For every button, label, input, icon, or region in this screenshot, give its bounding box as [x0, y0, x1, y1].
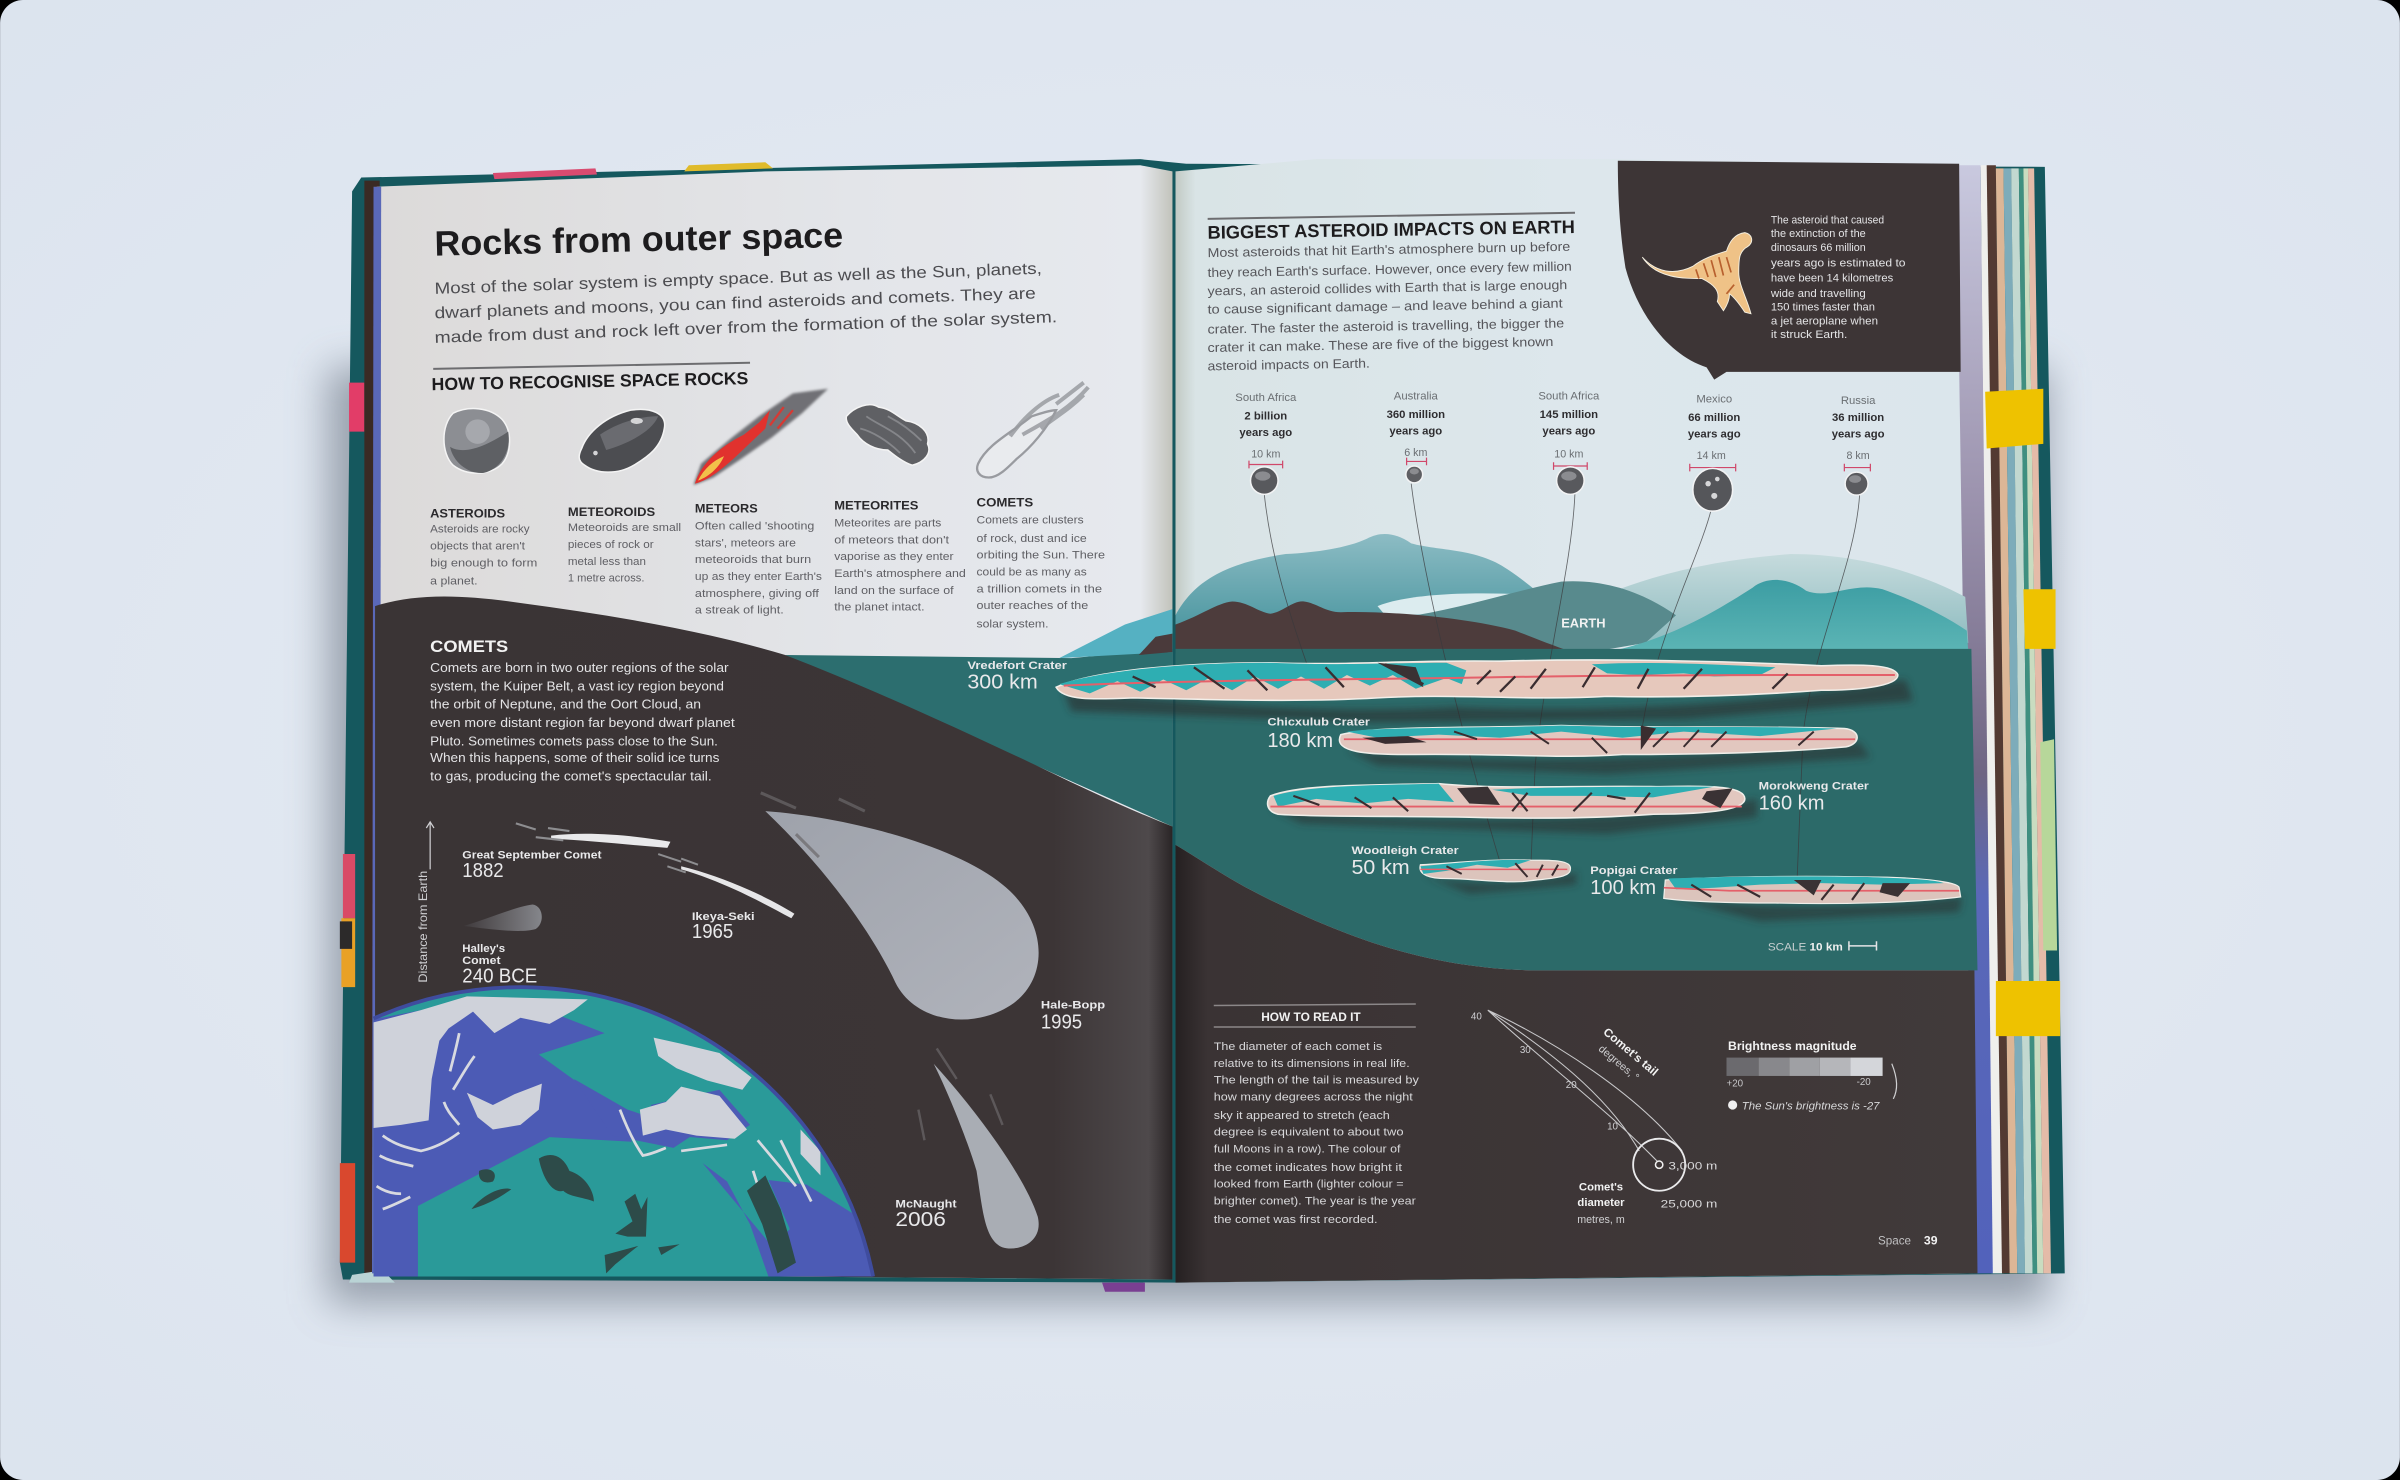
- brightness legend: The Sun's brightness is -27: [1742, 1101, 1880, 1113]
- comet: great september: 1882: [462, 860, 504, 882]
- caption: comets: orbiting the Sun. There: [977, 550, 1105, 562]
- callout text: wide and travelling: [1770, 288, 1866, 300]
- left dark sky: [375, 596, 1172, 1280]
- scale: SCALE 10 km: [1768, 941, 1843, 953]
- caption: meteors: up as they enter Earth's: [695, 571, 822, 583]
- brightness legend: Brightness magnitude: [1728, 1039, 1857, 1053]
- how to read body: looked from Earth (lighter colour =: [1214, 1179, 1404, 1191]
- page number: 39: [1924, 1233, 1938, 1247]
- impact column: south africa 2 billion: 10 km: [1251, 449, 1280, 461]
- crater labels: Morokweng Crater: [1759, 781, 1869, 793]
- earth dark continents: [471, 1155, 796, 1273]
- comet reading diagram: 30: [1520, 1045, 1531, 1056]
- purple page stripe: [1956, 165, 1993, 1273]
- how to read body: sky it appeared to stretch (each: [1214, 1110, 1390, 1122]
- page number: Space: [1878, 1234, 1911, 1247]
- impact column: south africa 145: 145 million: [1540, 409, 1598, 421]
- crater: chicxulub: [1339, 725, 1870, 774]
- brightness legend: -20: [1857, 1077, 1871, 1088]
- caption: meteorites: the planet intact.: [834, 602, 925, 614]
- comet: mcnaught: 2006: [895, 1209, 946, 1231]
- crater labels: Woodleigh Crater: [1352, 845, 1459, 857]
- caption: meteors: [695, 502, 822, 617]
- brightness legend: [1726, 1039, 1897, 1113]
- earth globe: [374, 987, 882, 1276]
- right teal crater ground: [1176, 649, 1977, 970]
- comet: halley: 240 BCE: [462, 966, 537, 988]
- page edges: [1981, 165, 2051, 1273]
- comet reading diagram: diameter: [1577, 1197, 1625, 1209]
- caption: meteorites: METEORITES: [834, 499, 918, 513]
- impact column: south africa 2 billion: South Africa: [1235, 392, 1297, 404]
- caption: comets: [977, 496, 1105, 631]
- impact column: south africa 145: [1538, 390, 1600, 494]
- caption: meteoroids: 1 metre across.: [568, 573, 644, 585]
- impacts body text: years, an asteroid collides with Earth that is large enough: [1207, 277, 1567, 298]
- crater labels: 160 km: [1759, 793, 1824, 815]
- caption: comets: solar system.: [977, 619, 1048, 631]
- how to read body: [1214, 1041, 1419, 1226]
- caption: comets: of rock, dust and ice: [977, 533, 1087, 545]
- crater labels: [967, 660, 1869, 899]
- comet: mcnaught: [895, 1048, 1039, 1248]
- title: Rocks from outer space: [434, 216, 843, 264]
- caption: meteoroids: pieces of rock or: [568, 539, 654, 551]
- comet reading diagram: Comet's tail: [1601, 1025, 1661, 1079]
- crater labels: Vredefort Crater: [967, 660, 1068, 672]
- impact line paths: [1264, 484, 1860, 885]
- caption: meteoroids: METEOROIDS: [568, 505, 655, 519]
- how to read body: The length of the tail is measured by: [1214, 1075, 1419, 1087]
- comets section text: even more distant region far beyond dwarf planet: [430, 715, 735, 730]
- impacts body text: asteroid impacts on Earth.: [1207, 356, 1370, 373]
- impact column: mexico: years ago: [1688, 429, 1741, 441]
- callout text: a jet aeroplane when: [1771, 315, 1878, 327]
- page number: [1878, 1233, 1938, 1247]
- how to read body: how many degrees across the night: [1214, 1091, 1414, 1103]
- comet: great september: Great September Comet: [462, 850, 602, 862]
- caption: meteorites: vaporise as they enter: [834, 551, 954, 563]
- how to read body: the comet was first recorded.: [1214, 1214, 1378, 1226]
- caption: meteoroids: [568, 505, 681, 585]
- icon: meteor: [693, 389, 828, 485]
- impacts body text: to cause significant damage – and leave behind a giant: [1207, 296, 1563, 317]
- crater labels: 50 km: [1352, 857, 1410, 879]
- caption: comets: could be as many as: [977, 566, 1087, 578]
- how to read body: degree is equivalent to about two: [1214, 1127, 1404, 1139]
- earth white clouds: [374, 996, 820, 1175]
- caption: asteroids: Asteroids are rocky: [430, 524, 530, 536]
- caption: meteors: Often called 'shooting: [695, 521, 814, 533]
- caption: meteors: a streak of light.: [695, 605, 784, 617]
- caption: meteoroids: Meteoroids are small: [568, 522, 681, 534]
- crater labels: 300 km: [967, 672, 1038, 694]
- callout text: years ago is estimated to: [1771, 257, 1906, 269]
- left page: [372, 165, 1172, 1280]
- icon: comet outline: [977, 383, 1088, 478]
- crater: vredefort: [1056, 660, 1913, 722]
- caption: meteorites: of meteors that don't: [834, 534, 950, 546]
- scale: [1768, 941, 1876, 953]
- impact column: south africa 2 billion: 2 billion: [1244, 410, 1287, 422]
- comet reading diagram: 25,000 m: [1661, 1199, 1717, 1211]
- crater labels: Chicxulub Crater: [1267, 716, 1371, 728]
- comets section text: to gas, producing the comet's spectacular tail.: [430, 769, 712, 784]
- impact column: russia: years ago: [1832, 429, 1885, 441]
- impact column: russia: 8 km: [1847, 450, 1870, 462]
- icon: meteorite: [846, 405, 929, 465]
- heading: biggest asteroid impacts: BIGGEST ASTEROID IMPACTS ON EARTH: [1207, 216, 1575, 243]
- dinosaur callout: [1618, 161, 1961, 380]
- caption: meteorites: land on the surface of: [834, 585, 955, 597]
- callout text: dinosaurs 66 million: [1771, 242, 1866, 254]
- caption: comets: COMETS: [977, 496, 1033, 510]
- comets section text: [430, 637, 735, 784]
- impact column: south africa 2 billion: years ago: [1239, 427, 1292, 439]
- icon: asteroid: [444, 409, 510, 473]
- caption: meteors: atmosphere, giving off: [695, 588, 820, 600]
- comet reading diagram: 3,000 m: [1668, 1160, 1717, 1172]
- crater: morokweng: [1268, 784, 1757, 834]
- impact column: south africa 145: 10 km: [1554, 449, 1584, 461]
- impact column: mexico: 66 million: [1688, 412, 1740, 424]
- right dark base: [1176, 845, 1977, 1283]
- comet: halley: Comet: [462, 955, 501, 967]
- impacts body text: [1207, 239, 1572, 373]
- impacts body text: Most asteroids that hit Earth's atmosphere burn up before: [1207, 239, 1570, 260]
- comet: mcnaught: McNaught: [895, 1199, 957, 1211]
- earth label: EARTH: [1561, 616, 1606, 631]
- comet: hale-bopp: Hale-Bopp: [1041, 1000, 1105, 1012]
- caption: meteoroids: metal less than: [568, 556, 646, 568]
- callout text: the extinction of the: [1771, 228, 1866, 240]
- heading: how to recognise: HOW TO RECOGNISE SPACE ROCKS: [431, 368, 749, 394]
- comets section text: system, the Kuiper Belt, a vast icy region beyond: [430, 678, 724, 693]
- intro text: Most of the solar system is empty space. But as well as the Sun, planets,: [434, 260, 1042, 298]
- how to read body: relative to its dimensions in real life.: [1214, 1058, 1410, 1070]
- impact column: russia: [1832, 395, 1885, 495]
- impact column: russia: Russia: [1841, 395, 1876, 407]
- comet: ikeya-seki: 1965: [692, 921, 733, 943]
- hills: [1176, 534, 1968, 654]
- comet reading diagram: 20: [1566, 1080, 1577, 1091]
- impact column: australia: Australia: [1394, 390, 1439, 402]
- earth cloud streaks: [377, 1033, 811, 1209]
- comet reading diagram: Comet's: [1579, 1182, 1623, 1194]
- impact column: mexico: [1688, 394, 1741, 511]
- caption: comets: Comets are clusters: [977, 514, 1084, 526]
- caption: meteorites: Meteorites are parts: [834, 517, 942, 529]
- icon: dinosaur: [1642, 233, 1752, 314]
- comet: hale-bopp: 1995: [1041, 1012, 1082, 1034]
- book cover: [340, 159, 2065, 1292]
- caption: asteroids: big enough to form: [430, 557, 537, 569]
- intro text: [434, 260, 1057, 347]
- comet reading diagram: metres, m: [1577, 1214, 1625, 1226]
- caption: asteroids: [430, 506, 537, 588]
- comets section text: the orbit of Neptune, and the Oort Cloud, an: [430, 697, 701, 712]
- axis: distance from earth: Distance from Earth: [417, 871, 430, 983]
- comet: ikeya-seki: [658, 854, 794, 943]
- comets section text: Pluto. Sometimes comets pass close to the Sun.: [430, 733, 718, 748]
- book shadow: [328, 367, 2048, 1304]
- caption: meteorites: Earth's atmosphere and: [834, 568, 966, 580]
- caption: asteroids: objects that aren't: [430, 540, 526, 552]
- brightness legend: +20: [1726, 1079, 1744, 1090]
- how to read body: the comet indicates how bright it: [1214, 1162, 1403, 1174]
- impact column: south africa 145: South Africa: [1538, 390, 1600, 402]
- caption: asteroids: ASTEROIDS: [430, 506, 505, 520]
- earth blue east: [574, 1079, 882, 1276]
- icon: meteoroid: [579, 409, 665, 472]
- impacts body text: crater. The faster the asteroid is travelling, the bigger the: [1207, 315, 1564, 337]
- impact column: south africa 2 billion: [1235, 392, 1297, 494]
- comet: great september: [462, 823, 670, 882]
- callout text: [1770, 214, 1906, 341]
- how to read body: The diameter of each comet is: [1214, 1041, 1382, 1053]
- how to read body: full Moons in a row). The colour of: [1214, 1143, 1401, 1155]
- comets section text: COMETS: [430, 637, 508, 656]
- intro text: made from dust and rock left over from the formation of the solar system.: [434, 308, 1057, 347]
- crater labels: 100 km: [1590, 877, 1656, 899]
- comet reading diagram: 40: [1471, 1011, 1482, 1022]
- caption: comets: outer reaches of the: [977, 600, 1088, 612]
- caption: meteors: stars', meteors are: [695, 537, 796, 549]
- impact column: south africa 145: years ago: [1542, 426, 1595, 438]
- how to read it: [1214, 1004, 1419, 1226]
- comets section text: When this happens, some of their solid ice turns: [430, 750, 719, 765]
- impact column: russia: 36 million: [1832, 412, 1884, 424]
- impact column: mexico: 14 km: [1697, 450, 1726, 462]
- impact column: australia: 6 km: [1404, 447, 1427, 459]
- caption: meteors: METEORS: [695, 502, 758, 516]
- comet reading diagram: 10: [1607, 1122, 1619, 1133]
- callout text: 150 times faster than: [1771, 302, 1875, 314]
- comet reading diagram: [1471, 1010, 1717, 1226]
- callout text: The asteroid that caused: [1771, 214, 1884, 226]
- impacts body text: crater it can make. These are five of the biggest known: [1207, 334, 1554, 355]
- comet: halley: Halley's: [462, 943, 505, 955]
- comet: hale-bopp: [761, 793, 1105, 1034]
- caption: meteors: meteoroids that burn: [695, 554, 811, 566]
- crater: woodleigh: [1420, 860, 1577, 894]
- impact column: mexico: Mexico: [1696, 394, 1732, 406]
- comet reading diagram: degrees, °: [1596, 1043, 1641, 1084]
- crater: popigai: [1664, 876, 1962, 921]
- impact column: australia: 360 million: [1387, 409, 1445, 421]
- comet: halley: [462, 905, 542, 988]
- intro text: dwarf planets and moons, you can find asteroids and comets. They are: [434, 284, 1036, 322]
- callout text: it struck Earth.: [1771, 329, 1847, 341]
- caption: meteorites: [834, 499, 966, 614]
- caption: asteroids: a planet.: [430, 576, 478, 588]
- how to read body: brighter comet). The year is the year: [1214, 1196, 1416, 1208]
- impacts body text: they reach Earth's surface. However, once every few million: [1207, 259, 1572, 280]
- crater labels: Popigai Crater: [1590, 865, 1678, 877]
- impact column: australia: [1387, 390, 1445, 483]
- crater labels: 180 km: [1267, 730, 1333, 752]
- impact column: australia: years ago: [1389, 426, 1442, 438]
- axis: distance from earth: [417, 822, 434, 983]
- earth blue oceans: [374, 1002, 632, 1276]
- callout text: have been 14 kilometres: [1771, 273, 1893, 285]
- caption: comets: a trillion comets in the: [977, 583, 1102, 595]
- yellow tabs: [1985, 389, 2060, 1036]
- comet: ikeya-seki: Ikeya-Seki: [692, 911, 755, 923]
- comets section text: Comets are born in two outer regions of the solar: [430, 660, 729, 675]
- right page: [1176, 159, 1977, 1283]
- left teal section: [785, 609, 1172, 826]
- how to read it: HOW TO READ IT: [1261, 1010, 1361, 1024]
